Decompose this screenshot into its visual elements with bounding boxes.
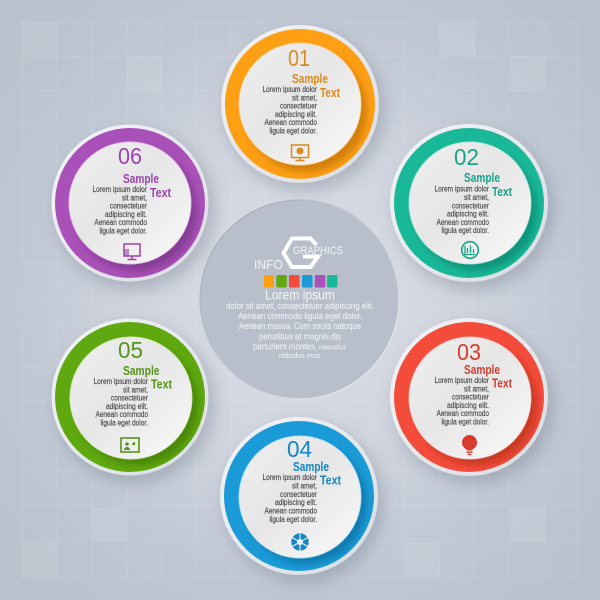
circle badge [52, 124, 215, 290]
body text: consectetuer [111, 394, 148, 403]
body text: Aenean commodo [436, 409, 489, 418]
body text: adipiscing elit. [275, 498, 317, 507]
heading: Text [151, 376, 173, 392]
panel: center circle [200, 200, 399, 399]
glass disc [200, 200, 399, 399]
body text: consectetuer [452, 393, 489, 402]
heading: Sample [293, 459, 329, 474]
circle badge [220, 417, 384, 583]
circle badge [390, 318, 554, 484]
heading: Text [150, 185, 172, 200]
body text [434, 376, 489, 426]
body text: sit amet, [464, 193, 489, 202]
body text: adipiscing elit. [105, 210, 147, 219]
number: 02 [454, 144, 479, 170]
body text [262, 85, 317, 136]
heading: Text [320, 85, 341, 100]
heading: Text [492, 184, 513, 199]
colour swatches [264, 275, 338, 288]
body text: Aenean commodo [94, 218, 147, 227]
body text: sit amet, [292, 93, 317, 102]
heading [293, 459, 342, 488]
logo: info graphics [254, 238, 343, 272]
body text: penatibus et magnis dis [259, 332, 341, 342]
body text: adipiscing elit. [106, 402, 148, 411]
body text: dolor sit amet, consectetuer adipiscing elit. [226, 301, 374, 311]
body text: ligula eget dolor. [442, 226, 489, 235]
number: 06 [118, 143, 142, 169]
body text: adipiscing elit. [447, 210, 489, 219]
body text: parturient montes, [253, 342, 317, 352]
icon: hexagon G [284, 238, 318, 267]
body text: Aenean massa. Cum sociis natoque [239, 321, 361, 331]
heading: Sample [292, 71, 328, 86]
body text [262, 473, 317, 524]
number: 05 [118, 337, 143, 363]
body text: Lorem ipsum dolor [94, 377, 148, 386]
body text: Lorem ipsum dolor [434, 376, 489, 385]
body text: sit amet, [464, 384, 489, 393]
heading: Sample [464, 170, 500, 185]
body text: ligula eget dolor. [270, 515, 317, 524]
icon: camera aperture [291, 533, 309, 551]
number: 04 [287, 436, 312, 462]
icon: light bulb [462, 435, 477, 454]
circle badge [390, 124, 554, 290]
body text: Aenean commodo [436, 218, 489, 227]
heading: Sample [123, 171, 159, 186]
body text [226, 301, 374, 360]
heading: Sample [123, 363, 160, 378]
body text: consectetuer [280, 102, 317, 111]
heading [292, 71, 341, 100]
body text: Lorem ipsum dolor [262, 473, 317, 482]
body text: ligula eget dolor. [100, 226, 147, 236]
body text: consectetuer [110, 202, 147, 211]
body text: Lorem ipsum dolor [434, 185, 489, 194]
body text: adipiscing elit. [275, 110, 317, 119]
icon: presentation board [121, 438, 139, 452]
number: 01 [288, 45, 310, 71]
body text: Aenean commodo ligula eget dolor. [238, 311, 362, 321]
body text: consectetuer [280, 490, 317, 499]
heading [123, 363, 173, 392]
body text: Aenean commodo [96, 410, 148, 419]
panel: 01 [221, 25, 385, 191]
body text: ligula eget dolor. [442, 418, 489, 426]
heading [464, 170, 513, 199]
heading: Text [492, 376, 513, 390]
body text: Aenean commodo [264, 118, 317, 127]
body text: sit amet, [292, 481, 317, 490]
body text: Lorem ipsum dolor [92, 185, 147, 194]
body text: ligula eget dolor. [100, 418, 148, 428]
body text: Lorem ipsum dolor [262, 85, 317, 94]
heading: Sample [464, 362, 500, 377]
icon: desktop monitor [124, 244, 140, 260]
body text: sit amet, [122, 193, 147, 202]
body text: Aenean commodo [264, 507, 317, 516]
heading: Lorem ipsum [265, 286, 335, 302]
circle badge [221, 25, 385, 191]
body text: consectetuer [452, 201, 489, 210]
panel: 05 [52, 318, 215, 484]
body text [94, 377, 148, 428]
heading: Text [320, 472, 342, 488]
body text: sit amet, [123, 385, 148, 394]
panel: 06 [52, 124, 215, 290]
heading [123, 171, 172, 200]
body text: ligula eget dolor. [270, 126, 317, 136]
icon: round chart badge [462, 242, 478, 258]
number: 03 [457, 339, 481, 365]
panel: 03 [390, 318, 554, 484]
body text: adipiscing elit. [447, 401, 489, 410]
body text: nascetur [319, 342, 346, 352]
logo word: graphics: GRAPHICS [293, 245, 343, 257]
heading [464, 362, 513, 390]
body text [434, 185, 489, 235]
logo word: info: INFO [254, 257, 283, 272]
panel: 02 [390, 124, 554, 290]
body text [92, 185, 147, 236]
circle badge [52, 318, 215, 484]
body text: ridiculus mus [279, 351, 320, 360]
panel: 04 [220, 417, 384, 583]
icon: monitor with pie [292, 145, 308, 160]
